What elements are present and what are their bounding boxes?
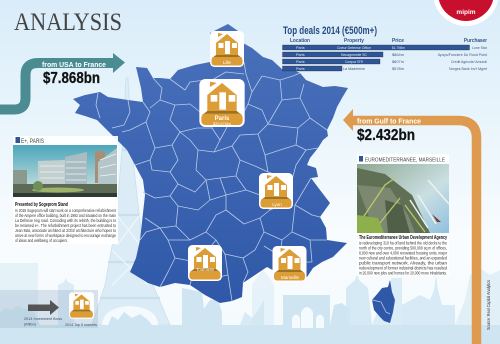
table: top deals: $807m bbox=[392, 60, 404, 64]
logo: mipim: mipim bbox=[456, 9, 476, 16]
icon: Lyon: Lyon bbox=[272, 202, 282, 207]
table: top deals: Price bbox=[392, 38, 404, 44]
table: top deals: Lone Star bbox=[472, 46, 488, 50]
arrow: investment flows key bbox=[28, 300, 59, 315]
table: top deals: Coeur Defense Office bbox=[337, 46, 371, 50]
panel: Euromediterranee Marseille: EUROMEDITERRANEE, MARSEILLE bbox=[365, 158, 445, 164]
table: top deals: Credit Agricole/ Amundi bbox=[451, 60, 487, 64]
panel: E+ Paris bbox=[13, 136, 118, 244]
mainland bbox=[73, 24, 348, 303]
flow label: USA: from USA to France bbox=[42, 60, 106, 69]
icon: Toulouse: Toulouse bbox=[196, 267, 215, 272]
skyline arches bbox=[292, 307, 324, 328]
icon: Paris bbox=[199, 79, 245, 127]
icon: Lyon bbox=[259, 173, 293, 209]
legend bbox=[0, 290, 98, 328]
eiffel tower bbox=[92, 78, 170, 326]
corsica bbox=[372, 280, 395, 323]
arrow: Gulf to France bbox=[343, 109, 476, 344]
icon: Toulouse bbox=[188, 245, 222, 281]
icon: Paris: $20.576bn bbox=[213, 122, 231, 126]
icon: Paris: Paris bbox=[215, 116, 230, 122]
text block: Euromediterranee description: The Euromediterranee Urban Development Agency bbox=[359, 235, 447, 241]
legend text: 2014 Top 5 markets bbox=[65, 323, 97, 327]
table: top deals: Paris bbox=[296, 60, 305, 64]
table: top deals: Neuagrenelle SC bbox=[341, 53, 367, 57]
icon: Marseille: Marseille bbox=[281, 275, 299, 280]
text block: Euromediterranee description: in 20,000 new jobs and homes for 20,000 more inhabitants. bbox=[359, 270, 447, 276]
skyline silhouette bbox=[0, 263, 500, 344]
text block: E+ description: Jean Mas, associate architect at 2/3/4/ architecture who hopes to bbox=[15, 228, 116, 233]
icon: markets key bbox=[69, 292, 94, 319]
text block: Euromediterranee description: public transport network. Already, the urban bbox=[359, 260, 448, 266]
table: top deals: Paris bbox=[296, 46, 305, 50]
table: top deals: Property bbox=[344, 38, 364, 44]
text block: Euromediterranee description bbox=[359, 235, 448, 276]
icon: Lille: Lille bbox=[223, 60, 231, 65]
text block: Euromediterranee description: north of the city centre, providing 500,000 sq m of offices, bbox=[359, 246, 447, 250]
table: top deals bbox=[282, 25, 488, 71]
table: top deals: La Madeleine bbox=[343, 67, 365, 71]
flow label: USA bbox=[42, 60, 106, 87]
photo: E+ building bbox=[13, 145, 117, 197]
text block: Euromediterranee description: is redeveloping 310 ha of land behind the old docks to the bbox=[359, 240, 447, 246]
source note: Source: Real Capital Analytics bbox=[486, 279, 491, 330]
text block: E+ description: of ideas and wellbeing of occupiers. bbox=[15, 238, 68, 243]
photo: Marseille aerial bbox=[357, 164, 449, 233]
table: top deals: Location bbox=[290, 38, 310, 44]
table: top deals: Campus SFR bbox=[345, 60, 363, 64]
table: top deals: Purchaser bbox=[464, 38, 487, 44]
table: top deals: $578m bbox=[392, 67, 404, 71]
text block: E+ description bbox=[15, 202, 117, 243]
table: top deals: Paris bbox=[296, 53, 305, 57]
arrow: USA to France bbox=[0, 53, 125, 110]
table: top deals: Top deals 2014 (€500m+) bbox=[283, 25, 377, 37]
table: top deals: Paris bbox=[296, 67, 305, 71]
legend text: (#/$bn) bbox=[24, 322, 37, 326]
table: top deals: $1,794bn bbox=[392, 46, 405, 50]
icon: Lille bbox=[210, 31, 244, 67]
map of France bbox=[73, 24, 395, 323]
table: top deals: Norges Bank Inv't Mgmt bbox=[449, 67, 488, 71]
text block: E+ description: of the Ampere office building, built in 1992 and situated on the main bbox=[15, 213, 116, 218]
text block: E+ description: Presented by Sogeprom Stand bbox=[15, 202, 68, 208]
text block: Euromediterranee description: redevelopment of former industrial districts has resulted bbox=[359, 266, 448, 270]
flow label: Gulf: $2.432bn bbox=[357, 127, 415, 144]
text block: Euromediterranee description: 8,000 new and over 4,000 renovated housing units, major bbox=[359, 250, 447, 256]
legend text bbox=[24, 317, 97, 327]
table: top deals: $864m bbox=[392, 53, 404, 57]
table: top deals: Apsys/Fonciere Du Rond Point bbox=[438, 53, 488, 57]
icon: Marseille bbox=[272, 246, 306, 282]
text block: E+ description: be renamed e+. The refurbishment project has been entrusted to bbox=[15, 223, 116, 228]
text block: E+ description: La Defense ring road. Coinciding with its rebirth, the building is to bbox=[15, 218, 116, 223]
flow label: USA: $7.868bn bbox=[43, 70, 100, 87]
text block: Euromediterranee description: new cultural and educational facilities, and an expanded bbox=[359, 256, 447, 260]
text block: E+ description: In 2015 Sogeprom will start work on a comprehensive refurbishment bbox=[15, 208, 117, 213]
flow label: Gulf: from Gulf to France bbox=[357, 116, 421, 126]
text block: E+ description: arrive at new forms of workspace designed to encourage exchange bbox=[15, 233, 116, 238]
panel: Euromediterranee Marseille bbox=[357, 154, 449, 276]
title: ANALYSIS bbox=[14, 9, 122, 36]
panel: E+ Paris: E+, PARIS bbox=[21, 139, 44, 145]
department borders bbox=[96, 62, 390, 314]
flow label: Gulf bbox=[357, 116, 421, 144]
legend text: 2014 Investment flows bbox=[24, 317, 62, 321]
logo: mipim bbox=[433, 0, 499, 26]
